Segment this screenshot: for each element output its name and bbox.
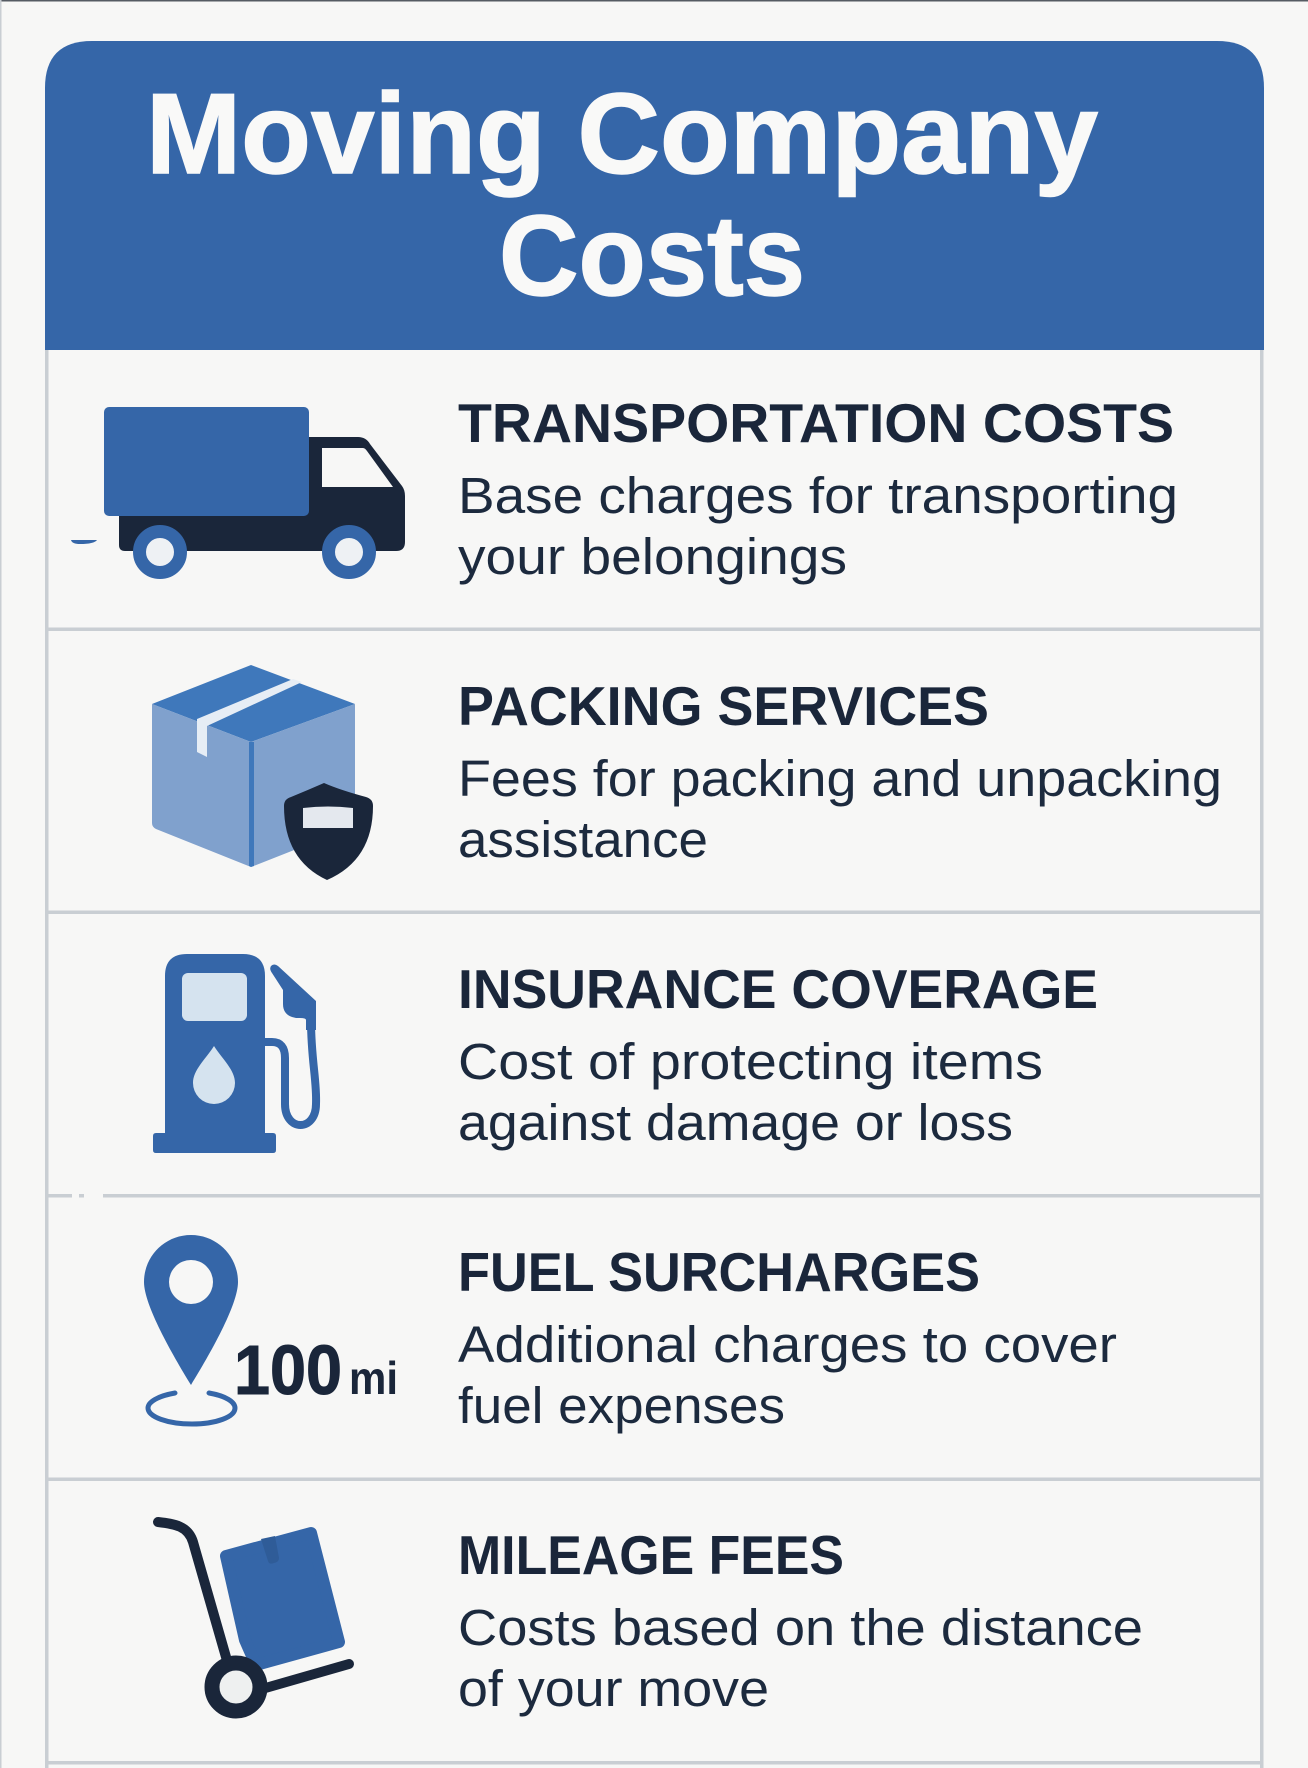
- icon: truck: [71, 407, 405, 572]
- description: packing services: [458, 750, 1222, 868]
- icon: map pin with distance: [144, 1235, 398, 1424]
- title: [146, 71, 1098, 320]
- description: fuel surcharges: Additional charges to cover: [458, 1316, 1117, 1373]
- heading: transportation costs: TRANSPORTATION COSTS: [458, 392, 1174, 454]
- description: packing services: assistance: [458, 811, 708, 868]
- description: insurance coverage: Cost of protecting items: [458, 1033, 1043, 1090]
- row: packing services: [152, 665, 1222, 880]
- description: insurance coverage: [458, 1033, 1043, 1151]
- distance label: mi: [349, 1352, 398, 1404]
- row: fuel surcharges: [144, 1235, 1117, 1434]
- description: mileage fees: [458, 1599, 1143, 1717]
- title: Costs: [499, 193, 805, 320]
- description: mileage fees: of your move: [458, 1660, 769, 1717]
- heading: packing services: PACKING SERVICES: [458, 675, 989, 737]
- icon: box with shield: [152, 665, 373, 880]
- heading: insurance coverage: INSURANCE COVERAGE: [458, 958, 1098, 1020]
- icon: fuel pump: [153, 954, 316, 1153]
- description: transportation costs: Base charges for transporting: [458, 467, 1178, 524]
- description: mileage fees: Costs based on the distance: [458, 1599, 1143, 1656]
- description: insurance coverage: against damage or loss: [458, 1094, 1013, 1151]
- description: transportation costs: [458, 467, 1178, 585]
- row: transportation costs: [71, 392, 1178, 585]
- description: packing services: Fees for packing and unpacking: [458, 750, 1222, 807]
- row: insurance coverage: [153, 954, 1098, 1153]
- row: mileage fees: [158, 1522, 1143, 1717]
- distance label: 100: [234, 1331, 342, 1409]
- title: Moving Company: [146, 71, 1098, 198]
- icon: hand truck with box: [158, 1522, 349, 1711]
- heading: mileage fees: MILEAGE FEES: [458, 1524, 844, 1586]
- heading: fuel surcharges: FUEL SURCHARGES: [458, 1241, 980, 1303]
- description: fuel surcharges: fuel expenses: [458, 1377, 785, 1434]
- header banner: [45, 41, 1264, 350]
- description: fuel surcharges: [458, 1316, 1117, 1434]
- description: transportation costs: your belongings: [458, 528, 847, 585]
